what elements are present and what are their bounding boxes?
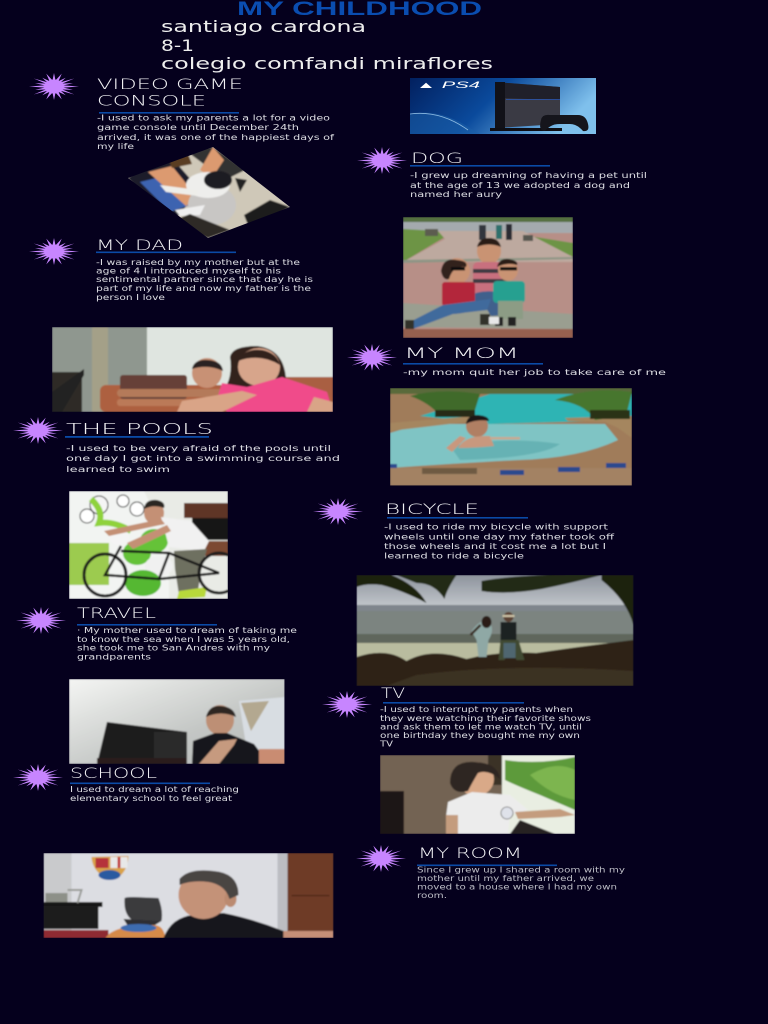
- heading: bicycle: BICYCLE: [385, 502, 479, 518]
- text block: travel: · My mother used to dream of taking me: [77, 625, 297, 635]
- photo: boy in bedroom with FC Barcelona crest: [44, 853, 334, 938]
- text block: video game console: game console until December 24th: [97, 122, 299, 132]
- author block: 8-1: [161, 36, 194, 55]
- author block: [161, 17, 493, 73]
- heading: my room: MY ROOM: [418, 846, 522, 862]
- text block: dog: -I grew up dreaming of having a pet until: [410, 170, 647, 180]
- heading: my dad: MY DAD: [96, 238, 183, 254]
- text block: the pools: [66, 443, 340, 474]
- text block: my room: [417, 864, 625, 900]
- icon: purple starburst: [313, 498, 363, 525]
- text block: bicycle: those wheels and it cost me a lot but I: [384, 541, 606, 551]
- text block: my dad: [96, 257, 313, 302]
- text block: video game console: my life: [97, 141, 134, 151]
- icon: purple starburst: [29, 73, 79, 100]
- panel: bicycle: [313, 498, 614, 560]
- photo: young boy in school uniform by window: [380, 755, 575, 834]
- author block: colegio comfandi miraflores: [161, 54, 493, 73]
- text block: video game console: arrived, it was one of the happiest days of: [97, 132, 335, 142]
- panel: travel: [16, 606, 297, 662]
- text block: travel: grandparents: [77, 652, 151, 662]
- text block: tv: one birthday they bought me my own: [380, 730, 580, 740]
- heading: my mom: MY MOM: [404, 346, 519, 362]
- icon: purple starburst: [29, 238, 79, 265]
- text block: bicycle: learned to ride a bicycle: [384, 550, 524, 560]
- panel: my room: [356, 845, 625, 900]
- text block: my room: moved to a house where I had my own: [417, 882, 617, 892]
- icon: purple starburst: [13, 417, 63, 444]
- text block: travel: she took me to San Andres with my: [77, 642, 270, 652]
- text block: dog: [410, 170, 647, 199]
- text block: dog: named her aury: [410, 189, 502, 199]
- panel: my mom: [347, 344, 666, 377]
- text block: my dad: person I love: [96, 292, 165, 302]
- photo: PS4 console: [410, 78, 596, 134]
- text block: my dad: -I was raised by my mother but at the: [96, 257, 300, 267]
- icon: purple starburst: [356, 845, 406, 872]
- heading: video game console: CONSOLE: [97, 94, 206, 110]
- text block: bicycle: [384, 522, 614, 560]
- heading: video game console: [97, 77, 243, 110]
- heading: the pools: THE POOLS: [66, 420, 213, 438]
- icon: purple starburst: [16, 607, 66, 634]
- text block: school: [70, 784, 239, 803]
- text block: my dad: age of 4 I introduced myself to his: [96, 266, 281, 276]
- heading: tv: TV: [381, 686, 406, 702]
- text block: the pools: learned to swim: [66, 464, 170, 474]
- icon: purple starburst: [347, 344, 397, 371]
- photo: PS4 console: ▲ PS4: [416, 80, 480, 90]
- panel: tv: [322, 686, 591, 748]
- panel: video game console: [29, 73, 335, 151]
- photo: boy beside television: [69, 679, 284, 764]
- text block: my room: mother until my father arrived, we: [417, 873, 594, 883]
- photo: family at the beach under palms: [356, 575, 634, 686]
- text block: my dad: sentimental partner since that day he is: [96, 274, 313, 284]
- text block: my room: room.: [417, 890, 447, 900]
- panel: the pools: [13, 417, 340, 474]
- panel: my dad: [29, 238, 313, 302]
- text block: tv: TV: [379, 738, 393, 748]
- text block: my dad: part of my life and now my father is the: [96, 283, 311, 293]
- text block: tv: and ask them to let me watch TV, until: [380, 722, 582, 732]
- heading: school: SCHOOL: [70, 766, 157, 782]
- text block: travel: to know the sea when I was 5 years old,: [77, 634, 290, 644]
- text block: tv: -I used to interrupt my parents when: [380, 704, 573, 714]
- heading: dog: DOG: [411, 151, 463, 167]
- photo: mother and son on sofa: [52, 327, 333, 412]
- heading: travel: TRAVEL: [77, 606, 156, 622]
- photo: boy with bicycle and balloons: [69, 491, 228, 599]
- text block: video game console: [97, 112, 335, 151]
- icon: purple starburst: [357, 147, 407, 174]
- photo: boy in swimming pool: [390, 388, 632, 486]
- text block: school: I used to dream a lot of reaching: [70, 784, 239, 794]
- panel: dog: [357, 147, 647, 199]
- text block: my room: Since I grew up I shared a room with my: [417, 864, 625, 874]
- heading: video game console: VIDEO GAME: [97, 77, 243, 93]
- text block: dog: at the age of 13 we adopted a dog and: [410, 180, 630, 190]
- text block: bicycle: -I used to ride my bicycle with support: [384, 522, 609, 532]
- text block: tv: they were watching their favorite shows: [380, 713, 591, 723]
- text block: video game console: -I used to ask my parents a lot for a video: [97, 112, 330, 122]
- icon: purple starburst: [322, 691, 372, 718]
- text block: tv: [379, 704, 591, 748]
- text block: travel: [77, 625, 297, 662]
- photo: father with two children on a path: [403, 217, 573, 338]
- text block: my mom: -my mom quit her job to take care of me: [403, 367, 666, 377]
- text block: school: elementary school to feel great: [70, 793, 233, 803]
- icon: purple starburst: [13, 764, 63, 791]
- photo: puppy held by hands, tilted: [128, 147, 290, 238]
- text block: bicycle: wheels until one day my father took off: [384, 532, 614, 542]
- author block: santiago cardona: [161, 17, 366, 36]
- text block: the pools: one day I got into a swimming course and: [66, 453, 340, 463]
- text block: the pools: -I used to be very afraid of the pools until: [66, 443, 331, 453]
- panel: school: [13, 764, 239, 803]
